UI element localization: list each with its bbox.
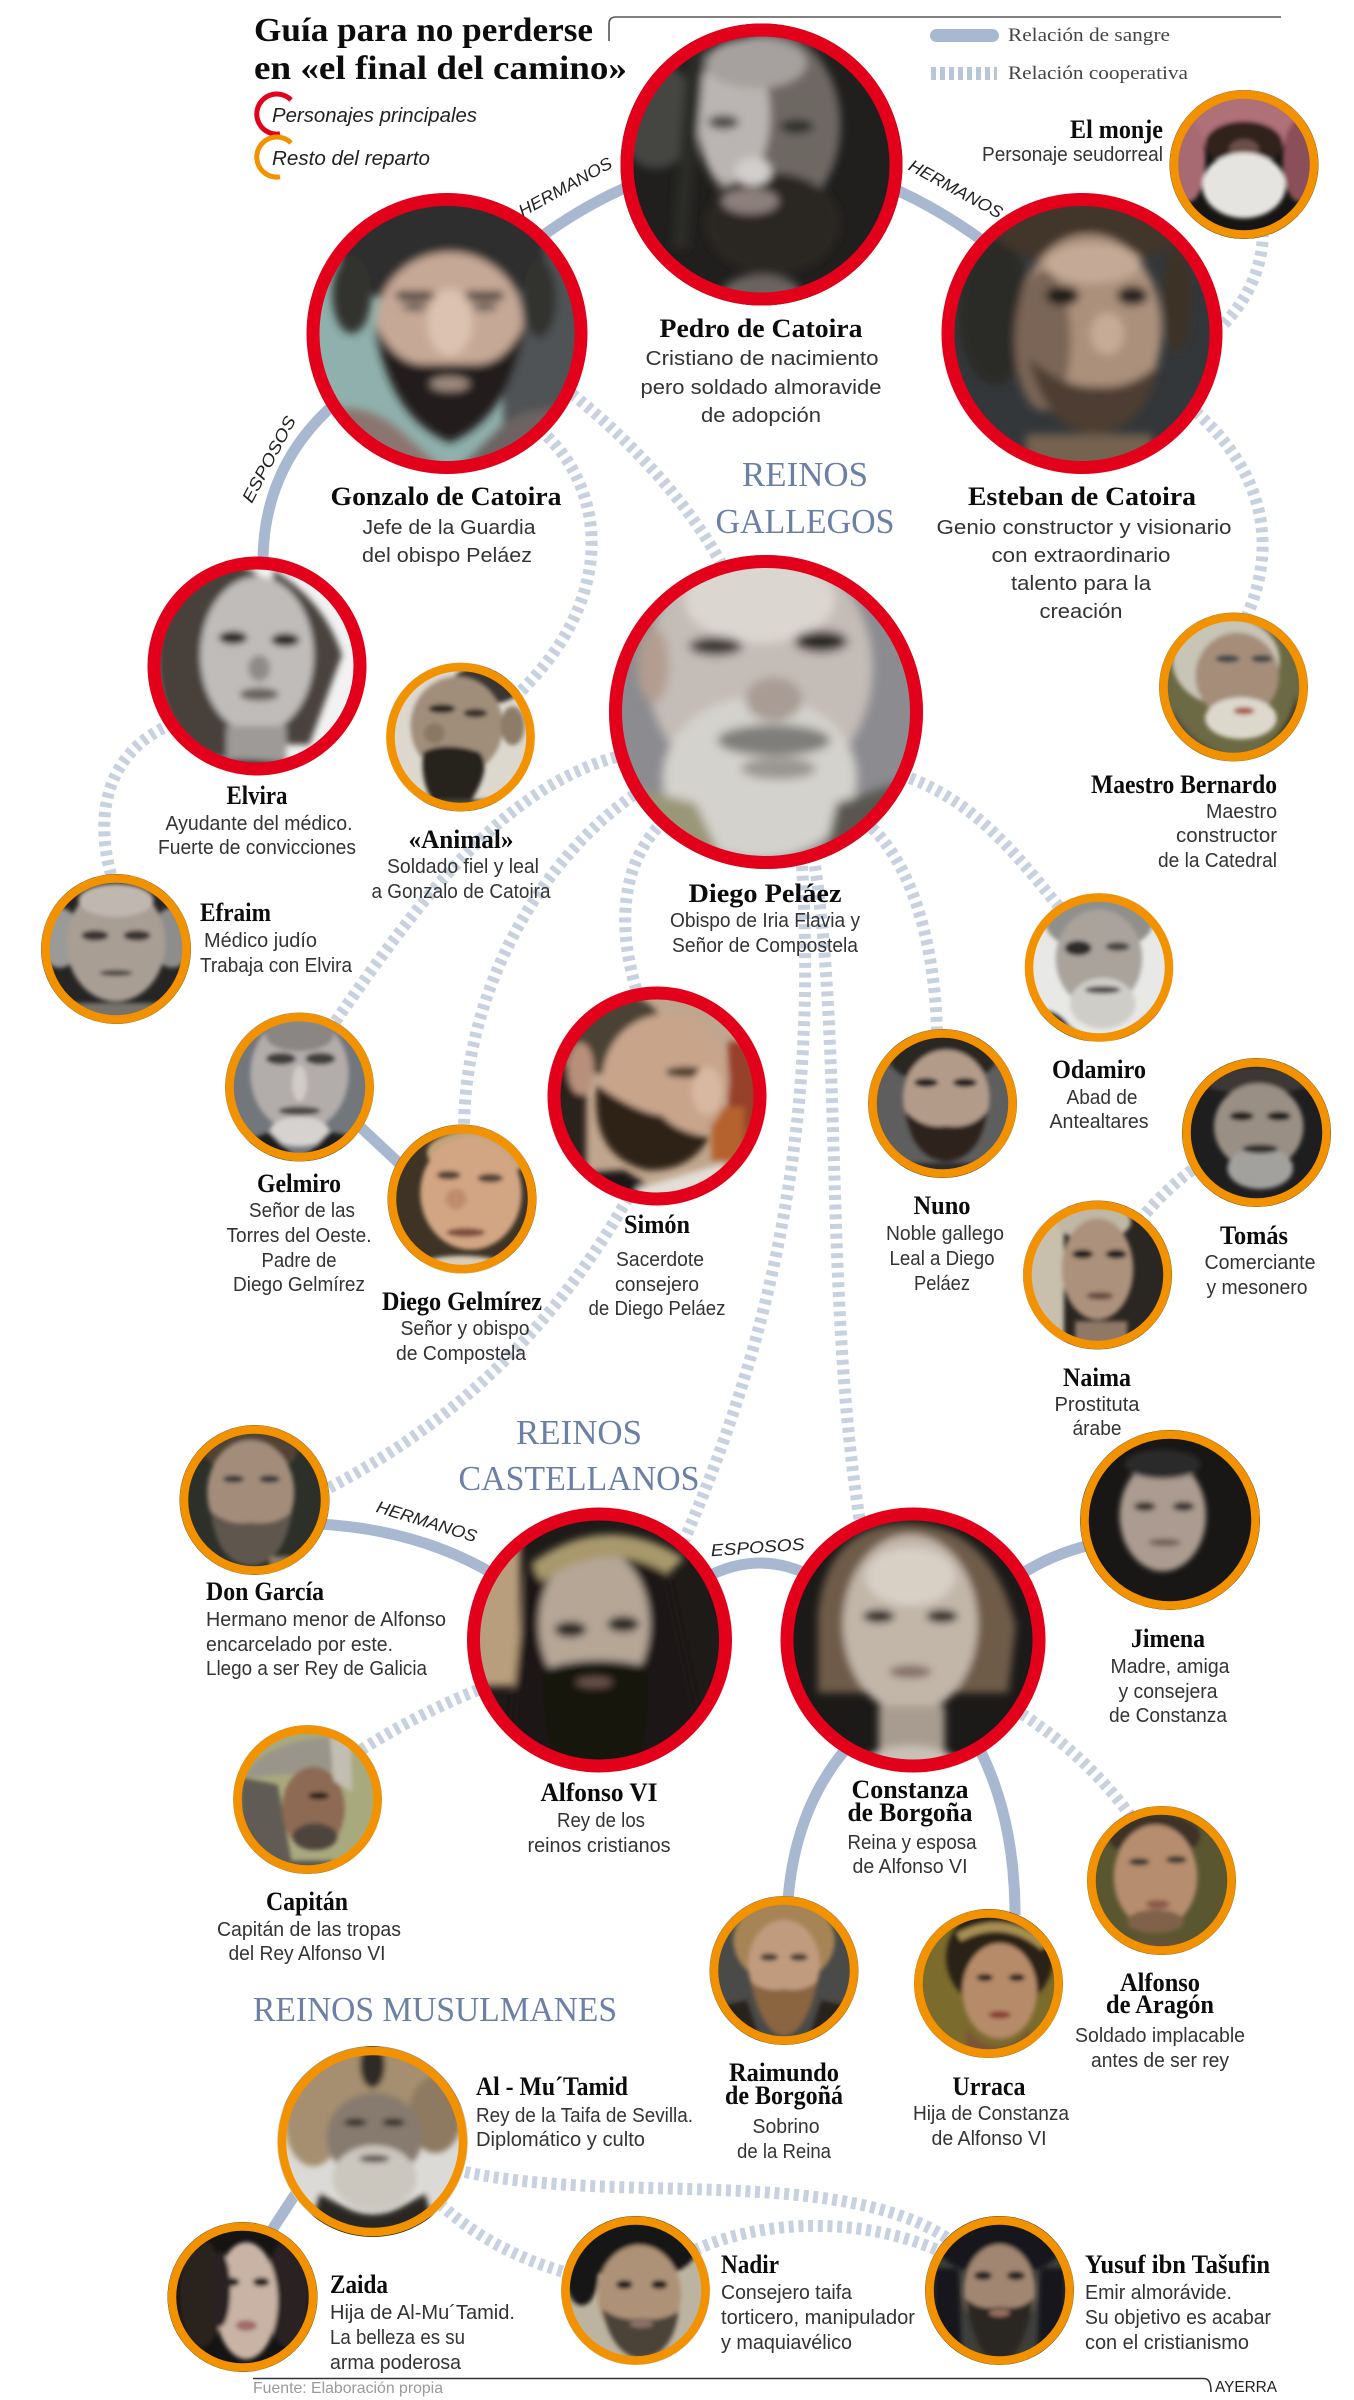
character: Don García — [180, 1425, 446, 1680]
description — [737, 2116, 832, 2163]
description: creación — [1040, 601, 1122, 623]
description: Sacerdote — [616, 1249, 704, 1271]
character: Constanza de Borgoña — [781, 1508, 1045, 1878]
name: Simón — [624, 1209, 690, 1239]
name: El monje — [1070, 114, 1163, 144]
heading: Reinos Castellanos: REINOS — [516, 1413, 642, 1452]
portrait: Zaida — [168, 2222, 318, 2372]
description — [226, 1200, 372, 1296]
relation label: hermanos right: HERMANOS — [905, 156, 1006, 223]
portrait: Nuno — [868, 1029, 1017, 1179]
description: Hija de Constanza — [913, 2103, 1070, 2125]
heading: Reinos Gallegos: GALLEGOS — [716, 502, 894, 541]
legend: character types: Personajes principales — [272, 105, 477, 127]
character: Diego Gelmírez — [382, 1124, 542, 1365]
description — [200, 930, 353, 977]
character: Alfonso de Aragón — [1075, 1806, 1245, 2072]
name — [725, 2057, 843, 2110]
name: Capitán — [266, 1886, 348, 1916]
name — [848, 1774, 972, 1827]
name: Raimundo — [729, 2057, 839, 2087]
relation label: hermanos Don García: HERMANOS — [374, 1497, 480, 1546]
description: Hija de Al-Mu´Tamid. — [330, 2302, 515, 2324]
portrait: Capitán — [233, 1725, 382, 1874]
description: Soldado fiel y leal — [387, 856, 539, 878]
portrait: Tomás — [1182, 1058, 1331, 1207]
character: Urraca — [913, 1905, 1070, 2150]
heading: Reinos Castellanos — [458, 1413, 700, 1498]
character: Nuno — [868, 1029, 1017, 1295]
name: Nadir — [721, 2249, 779, 2279]
character: Simón — [543, 987, 771, 1320]
relation label: esposos Alfonso and Constanza: ESPOSOS — [710, 1535, 806, 1560]
description: Madre, amiga — [1110, 1656, 1230, 1678]
description: Prostituta — [1054, 1394, 1140, 1416]
description: y consejera — [1118, 1681, 1218, 1703]
description: del Rey Alfonso VI — [228, 1943, 386, 1965]
description: Llego a ser Rey de Galicia — [206, 1658, 428, 1680]
portrait: Diego Gelmírez — [388, 1124, 536, 1279]
portrait: Urraca — [914, 1905, 1063, 2058]
name: Al - Mu´Tamid — [476, 2071, 628, 2101]
description — [217, 1919, 401, 1965]
description: Antealtares — [1050, 1111, 1148, 1133]
portrait: Simón — [543, 987, 771, 1205]
description: del obispo Peláez — [362, 545, 532, 567]
description: de adopción — [701, 405, 821, 427]
portrait: Animal — [386, 662, 535, 813]
description: y maquiavélico — [721, 2332, 852, 2354]
description — [1054, 1394, 1140, 1440]
character: Animal — [372, 662, 551, 903]
description — [206, 1609, 446, 1680]
description: Comerciante — [1204, 1252, 1316, 1274]
portrait: Yusuf — [925, 2213, 1074, 2365]
portrait: Odamiro — [1024, 893, 1174, 1042]
description — [1204, 1252, 1316, 1299]
name: Odamiro — [1052, 1054, 1146, 1084]
description: de la Reina — [737, 2141, 832, 2163]
name: «Animal» — [408, 824, 514, 854]
character: Maestro Bernardo — [1091, 612, 1308, 872]
description: Personaje seudorreal — [982, 144, 1163, 166]
character: Esteban de Catoira — [936, 192, 1232, 623]
relation label: esposos Gonzalo and Elvira: ESPOSOS — [238, 412, 300, 506]
description — [476, 2105, 693, 2151]
heading: Reinos Castellanos: CASTELLANOS — [458, 1459, 700, 1498]
character: Zaida — [168, 2222, 515, 2374]
cooperative connectors — [104, 232, 1263, 2272]
description: antes de ser rey — [1091, 2050, 1229, 2072]
description: Su objetivo es acabar — [1085, 2307, 1271, 2329]
description — [721, 2282, 915, 2354]
character: Diego Peláez — [609, 542, 923, 957]
description: Señor de Compostela — [672, 935, 859, 957]
name: Tomás — [1220, 1220, 1288, 1250]
description: con extraordinario — [992, 545, 1170, 567]
name: Don García — [206, 1576, 324, 1606]
description — [1075, 2025, 1245, 2072]
portrait: Maestro Bernardo — [1159, 612, 1308, 762]
name: Alfonso VI — [540, 1777, 658, 1807]
description: constructor — [1176, 825, 1277, 847]
name: Diego Gelmírez — [382, 1286, 542, 1316]
name: de Borgoña — [848, 1797, 972, 1827]
description — [1085, 2282, 1271, 2354]
character: Gelmiro — [225, 1012, 374, 1296]
description: Médico judío — [204, 930, 317, 952]
legend: character types — [257, 94, 477, 177]
description: árabe — [1072, 1418, 1122, 1440]
name: Gelmiro — [257, 1168, 341, 1198]
legend: relation types: Relación cooperativa — [1008, 63, 1189, 84]
description: Jefe de la Guardia — [362, 517, 536, 539]
description: Rey de la Taifa de Sevilla. — [476, 2105, 693, 2127]
character: Raimundo de Borgoñá — [710, 1896, 858, 2163]
name: Esteban de Catoira — [968, 481, 1196, 511]
description: de la Catedral — [1158, 850, 1277, 872]
portrait: Esteban — [942, 192, 1222, 476]
description: reinos cristianos — [528, 1835, 670, 1857]
portrait: Raimundo — [710, 1896, 858, 2045]
name: de Borgoñá — [725, 2080, 843, 2110]
description: Señor y obispo — [400, 1318, 530, 1340]
description: Diego Gelmírez — [233, 1274, 365, 1296]
description: arma poderosa — [330, 2352, 462, 2374]
description — [936, 517, 1232, 623]
description — [886, 1223, 1004, 1295]
description — [372, 856, 551, 903]
description — [1158, 801, 1277, 872]
description: Maestro — [1206, 801, 1277, 823]
description: Capitán de las tropas — [217, 1919, 401, 1941]
title: en «el final del camino» — [254, 50, 627, 87]
blood connectors — [263, 159, 1090, 2236]
description: de Constanza — [1109, 1705, 1228, 1727]
description — [848, 1832, 977, 1878]
description: Diplomático y culto — [476, 2129, 645, 2151]
name: Pedro de Catoira — [660, 313, 862, 343]
portrait: Efraim — [39, 874, 193, 1026]
character: Alfonso VI — [461, 1501, 732, 1857]
portrait: Jimena — [1080, 1430, 1260, 1610]
name: Maestro Bernardo — [1091, 769, 1277, 799]
description: Padre de — [262, 1250, 336, 1272]
description: Reina y esposa — [848, 1832, 977, 1854]
author credit: AYERRA — [1215, 2379, 1277, 2396]
character: Capitán — [217, 1725, 401, 1965]
description: Obispo de Iria Flavia y — [670, 910, 860, 932]
heading: Reinos Gallegos: REINOS — [742, 455, 868, 494]
top rule — [609, 17, 1281, 41]
portrait: Gonzalo — [306, 193, 588, 474]
character: Nadir — [561, 2212, 915, 2365]
description: consejero — [615, 1274, 699, 1296]
description: Genio constructor y visionario — [936, 517, 1232, 539]
name: Diego Peláez — [688, 878, 842, 908]
description — [528, 1810, 670, 1857]
name: Yusuf ibn Tašufin — [1085, 2249, 1270, 2279]
name: Jimena — [1131, 1623, 1205, 1653]
portrait: Elvira — [148, 557, 366, 795]
character: Odamiro — [1024, 893, 1174, 1133]
description: Ayudante del médico. — [166, 813, 352, 835]
heading: Reinos Musulmanes: REINOS MUSULMANES — [253, 1990, 617, 2029]
title: Guía para no perderse — [254, 12, 593, 49]
name: Elvira — [226, 780, 288, 810]
character: El monje — [982, 87, 1318, 239]
character: Gonzalo de Catoira — [307, 188, 601, 567]
description — [330, 2302, 515, 2374]
description: a Gonzalo de Catoira — [372, 881, 551, 903]
portrait: Don García — [180, 1425, 330, 1576]
description: Leal a Diego — [890, 1248, 994, 1270]
name: Nuno — [914, 1190, 970, 1220]
portrait: monje — [1170, 87, 1318, 239]
portrait: Nadir — [561, 2212, 710, 2365]
description: Fuerte de convicciones — [158, 837, 356, 859]
name: Alfonso — [1120, 1967, 1200, 1997]
character: Yusuf ibn Tašufin — [925, 2213, 1271, 2365]
name: Naima — [1063, 1362, 1131, 1392]
character: Pedro de Catoira — [616, 24, 902, 427]
source note: Fuente: Elaboración propia — [253, 2380, 443, 2397]
description: Rey de los — [557, 1810, 645, 1832]
character: Al-Mu´Tamid — [277, 2040, 693, 2242]
description: Hermano menor de Alfonso — [206, 1609, 446, 1631]
character: Jimena — [1080, 1430, 1260, 1727]
description: Soldado implacable — [1075, 2025, 1245, 2047]
name: Urraca — [952, 2071, 1026, 2101]
description: La belleza es su — [330, 2327, 465, 2349]
description: talento para la — [1011, 573, 1152, 595]
description: Trabaja con Elvira — [200, 955, 353, 977]
description: Abad de — [1066, 1087, 1138, 1109]
character: Naima — [1019, 1197, 1172, 1440]
portrait: Constanza — [780, 1508, 1046, 1772]
description: Consejero taifa — [721, 2282, 853, 2304]
description: encarcelado por este. — [206, 1634, 393, 1656]
description — [913, 2103, 1070, 2150]
description: Peláez — [914, 1273, 970, 1295]
footer rule — [253, 2378, 1211, 2392]
portrait: Diego Peláez — [609, 542, 923, 869]
legend: relation types — [930, 25, 1189, 84]
heading: Reinos Gallegos — [716, 455, 894, 541]
description — [640, 348, 882, 427]
description: Sobrino — [752, 2116, 820, 2138]
legend: character types: Resto del reparto — [272, 148, 430, 170]
name — [1106, 1967, 1214, 2019]
description — [158, 813, 356, 859]
name: Zaida — [330, 2269, 388, 2299]
description: de Alfonso VI — [852, 1856, 968, 1878]
description — [396, 1318, 530, 1365]
description: y mesonero — [1206, 1277, 1308, 1299]
description: de Compostela — [396, 1343, 527, 1365]
portrait: Gelmiro — [225, 1012, 374, 1162]
description: Emir almorávide. — [1085, 2282, 1232, 2304]
description: torticero, manipulador — [721, 2307, 915, 2329]
portrait: Alfonso VI — [461, 1501, 732, 1779]
description: con el cristianismo — [1085, 2332, 1249, 2354]
character: Elvira — [148, 557, 366, 859]
portrait: Naima — [1019, 1197, 1172, 1353]
name: Constanza — [852, 1774, 968, 1804]
description — [670, 910, 860, 957]
portrait: Al-Mu´Tamid — [277, 2040, 468, 2242]
description: Torres del Oeste. — [226, 1225, 372, 1247]
description — [362, 517, 536, 567]
description: Señor de las — [249, 1200, 355, 1222]
name: Gonzalo de Catoira — [330, 481, 562, 511]
description — [588, 1249, 726, 1320]
description — [1050, 1087, 1148, 1133]
description: pero soldado almoravide — [640, 377, 882, 399]
description: Cristiano de nacimiento — [646, 348, 878, 370]
relation label: hermanos left: HERMANOS — [515, 153, 616, 221]
name: de Aragón — [1106, 1989, 1214, 2019]
description: de Alfonso VI — [932, 2128, 1046, 2150]
description: de Diego Peláez — [588, 1298, 726, 1320]
description — [1109, 1656, 1230, 1727]
title — [254, 12, 627, 87]
character: Efraim — [39, 874, 353, 1026]
portrait: Pedro — [616, 24, 902, 314]
name: Efraim — [200, 897, 271, 927]
portrait: Alfonso de Aragón — [1087, 1806, 1236, 1955]
character: Tomás — [1182, 1058, 1331, 1299]
description: Noble gallego — [886, 1223, 1004, 1245]
legend: relation types: Relación de sangre — [1008, 25, 1170, 46]
